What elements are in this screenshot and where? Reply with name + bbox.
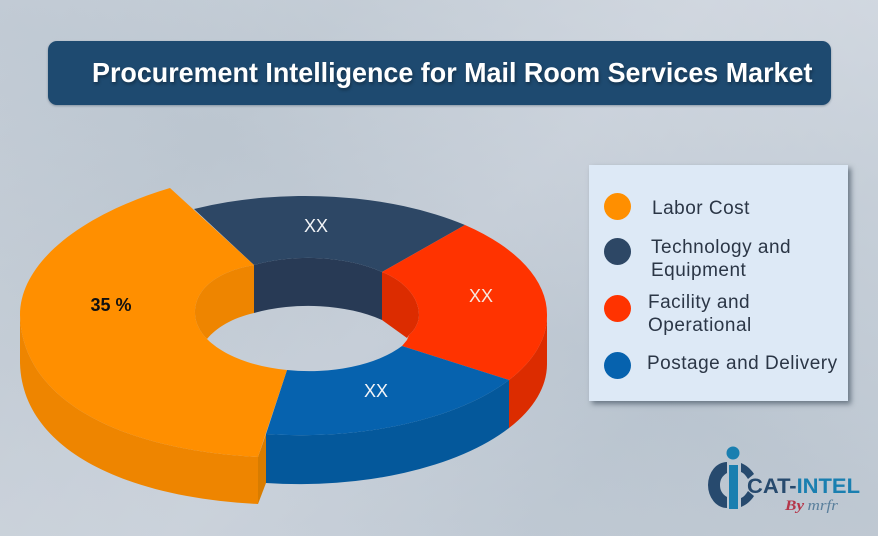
segment: labor cost [20, 188, 287, 504]
segment: postage and delivery [266, 346, 509, 484]
legend item: postage and delivery: Postage and Delivery [647, 353, 838, 374]
segment: facility and operational: XX [469, 286, 493, 306]
logo tagline: By mrfr [784, 498, 838, 514]
segment: postage and delivery: XX [364, 381, 388, 401]
segment: technology and equipment [194, 196, 465, 320]
legend item: facility and operational [604, 292, 752, 336]
legend panel [589, 165, 848, 401]
legend item: labor cost [604, 193, 750, 220]
logo wordmark: CAT-INTEL [747, 475, 860, 498]
logo: cat-intel [708, 446, 860, 514]
segment: facility and operational [382, 225, 547, 428]
legend item: technology and equipment: Technology and [651, 237, 791, 258]
segment: technology and equipment: XX [304, 216, 328, 236]
legend item: technology and equipment: Equipment [651, 260, 746, 280]
icon: logo mark [708, 446, 754, 509]
legend item: facility and operational: Operational [648, 314, 752, 336]
legend item: labor cost: Labor Cost [652, 198, 750, 219]
legend item: facility and operational: Facility and [648, 292, 750, 313]
title banner [48, 41, 831, 105]
legend item: postage and delivery [604, 352, 838, 379]
legend item: technology and equipment [604, 237, 791, 280]
segment: labor cost: 35 % [90, 295, 132, 315]
title banner: Procurement Intelligence for Mail Room Services Market [92, 57, 812, 88]
